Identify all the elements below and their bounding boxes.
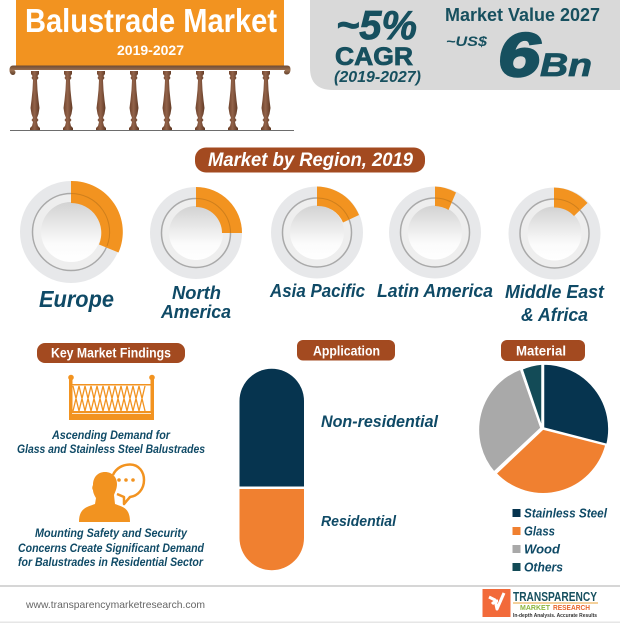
icon: person with speech bubble [79, 464, 144, 522]
legend: material [512, 506, 607, 574]
region label: Middle East and Africa [505, 282, 605, 325]
footer bottom rule [0, 622, 620, 623]
legend: material: Glass [524, 524, 555, 538]
capsule segment: non-residential [240, 369, 304, 486]
finding text: glass and steel: Glass and Stainless Steel Balustrades [17, 444, 205, 456]
website url: www.transparencymarketresearch.com [25, 599, 205, 611]
legend: material: Stainless Steel [524, 506, 607, 520]
region label: Asia Pacific: Asia Pacific [269, 281, 365, 301]
region label: North America: America [160, 302, 231, 322]
legend: material: Others [524, 560, 563, 574]
CAGR figure: ~5% [336, 2, 417, 48]
finding text: safety and security: Mounting Safety and Security [35, 528, 188, 540]
heading: key market findings: Key Market Findings [51, 344, 171, 360]
logo tagline: In-depth Analysis. Accurate Results [513, 613, 597, 619]
icon: fence [68, 375, 155, 420]
logo market: MARKET [520, 603, 550, 612]
finding text: safety and security: Concerns Create Significant Demand [18, 543, 205, 555]
heading: application [297, 340, 395, 360]
chart: application capsule [240, 369, 304, 570]
slice: glass [496, 429, 606, 494]
donut: North America [150, 187, 242, 279]
region label: Middle East and Africa: Middle East [505, 282, 605, 302]
heading: application: Application [313, 344, 380, 358]
finding text: glass and steel [17, 430, 205, 456]
heading: market by region: Market by Region, 2019 [208, 149, 413, 171]
region label: Europe: Europe [39, 286, 114, 312]
donut: Latin America [389, 186, 481, 278]
logo: Transparency Market Research [482, 589, 598, 619]
finding text: glass and steel: Ascending Demand for [51, 430, 170, 442]
panel: CAGR and market value [310, 0, 620, 90]
capsule segment: residential [240, 489, 304, 570]
logo research: RESEARCH [553, 603, 590, 612]
region label: North America: North [172, 283, 221, 303]
years subtitle: 2019-2027 [117, 43, 184, 58]
CAGR period: (2019-2027) [334, 69, 421, 86]
legend: material: Wood [524, 542, 561, 556]
region label: Latin America: Latin America [377, 281, 493, 301]
application label: residential: Residential [321, 513, 397, 530]
CAGR label: CAGR [335, 43, 413, 71]
region label: Middle East and Africa: & Africa [521, 305, 588, 325]
logo mark [482, 589, 510, 617]
application label: non-residential: Non-residential [321, 412, 439, 431]
title: Balustrade Market [25, 2, 277, 39]
currency label: ~US$ [446, 33, 487, 49]
donut: Asia Pacific [271, 186, 363, 278]
region label: North America [160, 283, 231, 322]
heading: material [501, 340, 585, 361]
market value figure: 6 [498, 21, 541, 89]
title banner [16, 0, 284, 66]
market value unit: Bn [540, 47, 592, 83]
footer rule [0, 585, 620, 587]
finding text: safety and security: for Balustrades in Residential Sector [18, 557, 203, 569]
slice: stainless steel [544, 364, 609, 444]
market value heading: Market Value 2027 [445, 5, 600, 25]
donut: Middle East and Africa [508, 188, 600, 280]
donut: Europe [20, 181, 123, 283]
chart: material pie [478, 364, 609, 494]
slice: wood [478, 369, 541, 472]
logo name: TRANSPARENCY [513, 589, 597, 604]
slice: others [522, 364, 542, 428]
finding text: safety and security [18, 528, 205, 569]
heading: material: Material [516, 344, 566, 358]
icon: balustrade railing [10, 66, 294, 131]
